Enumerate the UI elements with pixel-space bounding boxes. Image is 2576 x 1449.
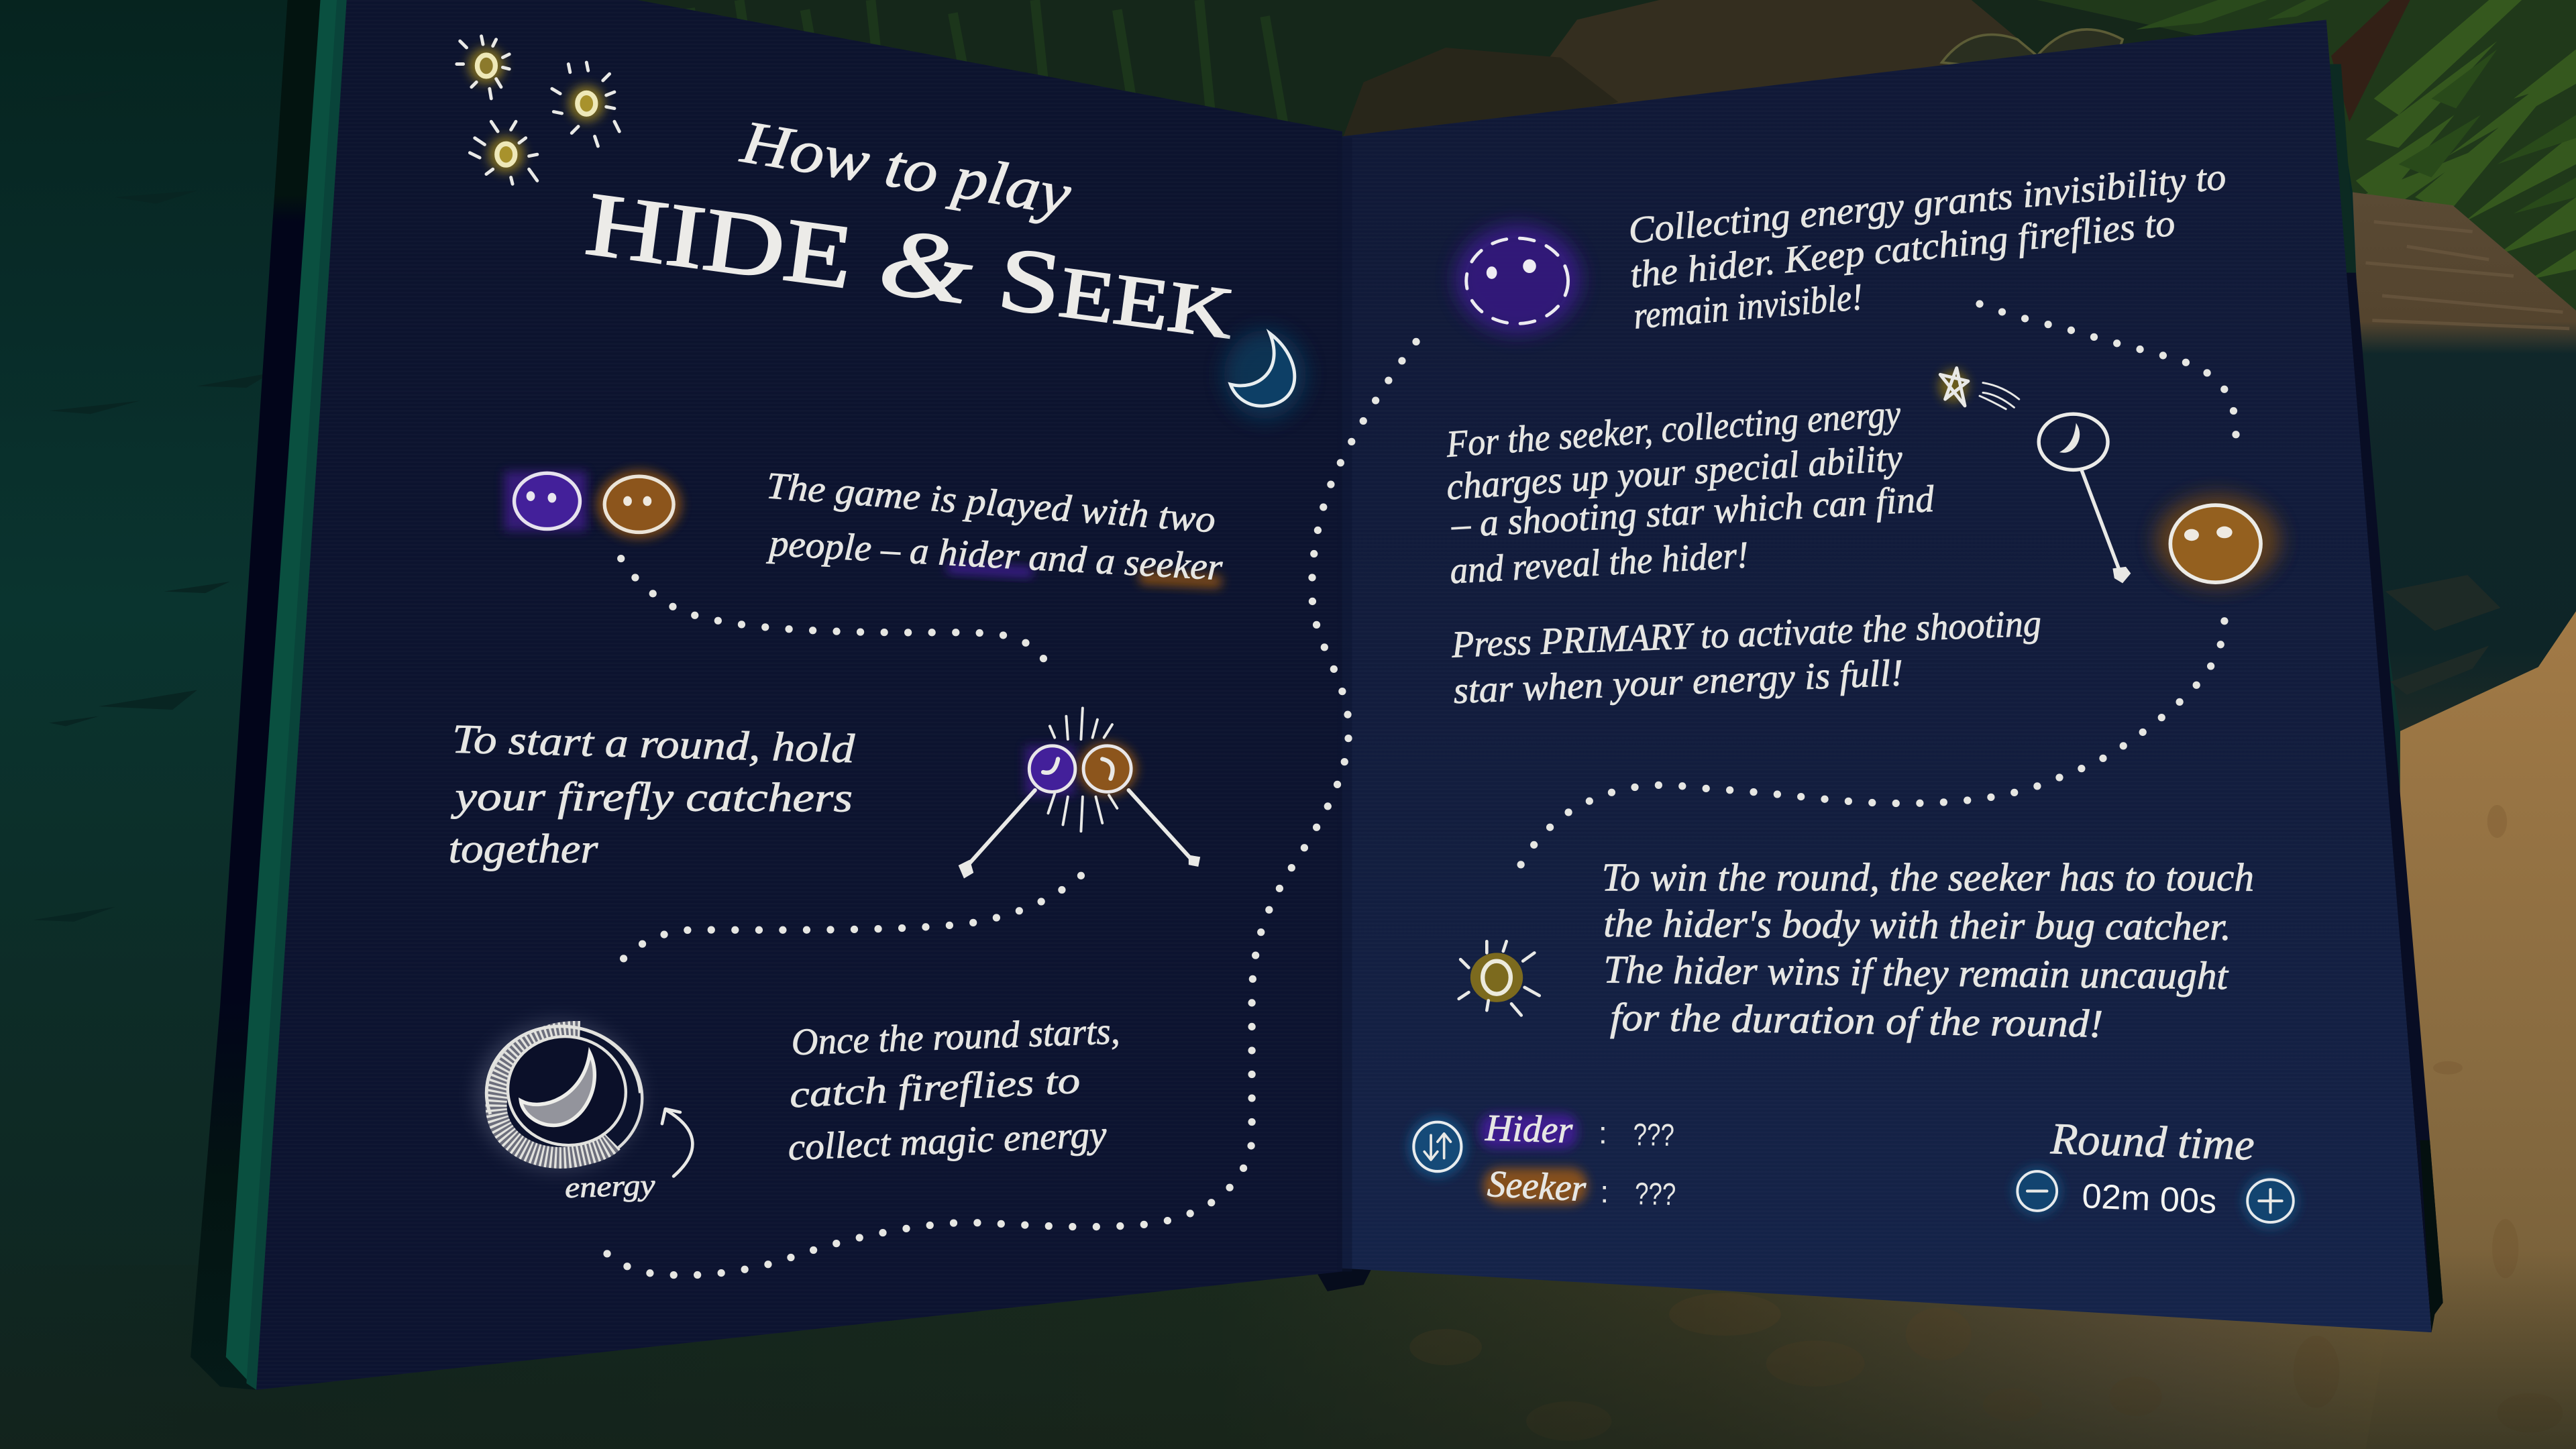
icon: hider and seeker faces: [504, 470, 682, 539]
icon: crescent moon: [1224, 330, 1306, 419]
icon: firefly catchers touching: [959, 708, 1199, 877]
title: How to play: How to play: [737, 107, 1076, 229]
line: for the duration of the round!: [1610, 996, 2103, 1046]
text: start a round: [449, 716, 855, 872]
value: seeker name: ???: [1635, 1176, 1676, 1212]
line: remain invisible!: [1632, 276, 1864, 337]
line: For the seeker, collecting energy: [1444, 393, 1902, 466]
line: Once the round starts,: [791, 1010, 1120, 1063]
text: once the round starts: [787, 1010, 1120, 1169]
line: The hider wins if they remain uncaught: [1603, 947, 2229, 998]
line: your firefly catchers: [450, 773, 853, 820]
panel: left page: [256, 0, 1342, 1390]
icon: shooting star: [1939, 368, 2019, 409]
label: seeker: Seeker: [1487, 1163, 1588, 1210]
text: intro: [765, 465, 1224, 588]
button: decrease time: [2012, 1167, 2061, 1216]
line: and reveal the hider!: [1449, 534, 1750, 592]
line: – a shooting star which can find: [1450, 478, 1935, 546]
line: together: [449, 826, 598, 872]
icon: three fireflies: [457, 36, 619, 184]
hider face: [504, 472, 586, 531]
text: seeker ability: [1444, 393, 1935, 592]
panel: right page: [1337, 19, 2431, 1332]
value: hider name: ???: [1633, 1117, 1674, 1152]
line: Collecting energy grants invisibility to: [1627, 156, 2228, 252]
line: people – a hider and a seeker: [765, 523, 1224, 588]
line: The game is played with two: [765, 465, 1217, 541]
line: collect magic energy: [787, 1114, 1108, 1169]
firefly two: [552, 62, 619, 146]
dotted path one: [621, 559, 1048, 665]
label: hider: Hider: [1485, 1108, 1574, 1151]
line: the hider. Keep catching fireflies to: [1628, 203, 2177, 297]
heading: round time: Round time: [2049, 1114, 2255, 1170]
icon: invisible hider: [1456, 225, 1580, 333]
firefly three: [470, 121, 537, 184]
dotted path four: [1980, 304, 2236, 442]
icon: bug catcher with moon: [2039, 414, 2131, 583]
line: catch fireflies to: [788, 1060, 1081, 1116]
icon: seeker face: [2155, 494, 2280, 586]
value: seeker name: [1600, 1175, 1676, 1212]
firefly one: [457, 36, 509, 99]
value: round time: 02m 00s: [2081, 1176, 2217, 1220]
highlight: hider: [946, 563, 1034, 578]
text: how to win: [1602, 855, 2254, 1046]
line: the hider's body with their bug catcher.: [1603, 902, 2231, 949]
icon: energy arrow: [662, 1109, 692, 1176]
dotted path two: [611, 875, 1081, 973]
line: To start a round, hold: [451, 716, 855, 771]
button: increase time: [2243, 1173, 2298, 1229]
dotted path five: [1518, 621, 2224, 872]
line: star when your energy is full!: [1452, 652, 1904, 712]
title: Hide and Seek: HIDE & SEEK: [580, 168, 1241, 359]
value: hider name: [1599, 1115, 1674, 1152]
dotted path three: central: [600, 341, 1416, 1275]
icon: energy ring: [476, 1014, 653, 1177]
line: Press PRIMARY to activate the shooting: [1450, 602, 2042, 666]
text: invisibility: [1627, 156, 2228, 337]
line: charges up your special ability: [1445, 437, 1904, 508]
value: seeker name: :: [1600, 1175, 1609, 1210]
line: To win the round, the seeker has to touch: [1602, 855, 2254, 899]
seeker face: [596, 470, 682, 539]
label: energy: energy: [564, 1169, 656, 1204]
icon: firefly: [1459, 941, 1540, 1015]
button: swap roles: [1408, 1116, 1467, 1178]
text: press primary: [1450, 602, 2042, 712]
highlight: seeker: [1138, 571, 1222, 588]
value: hider name: :: [1599, 1115, 1607, 1150]
